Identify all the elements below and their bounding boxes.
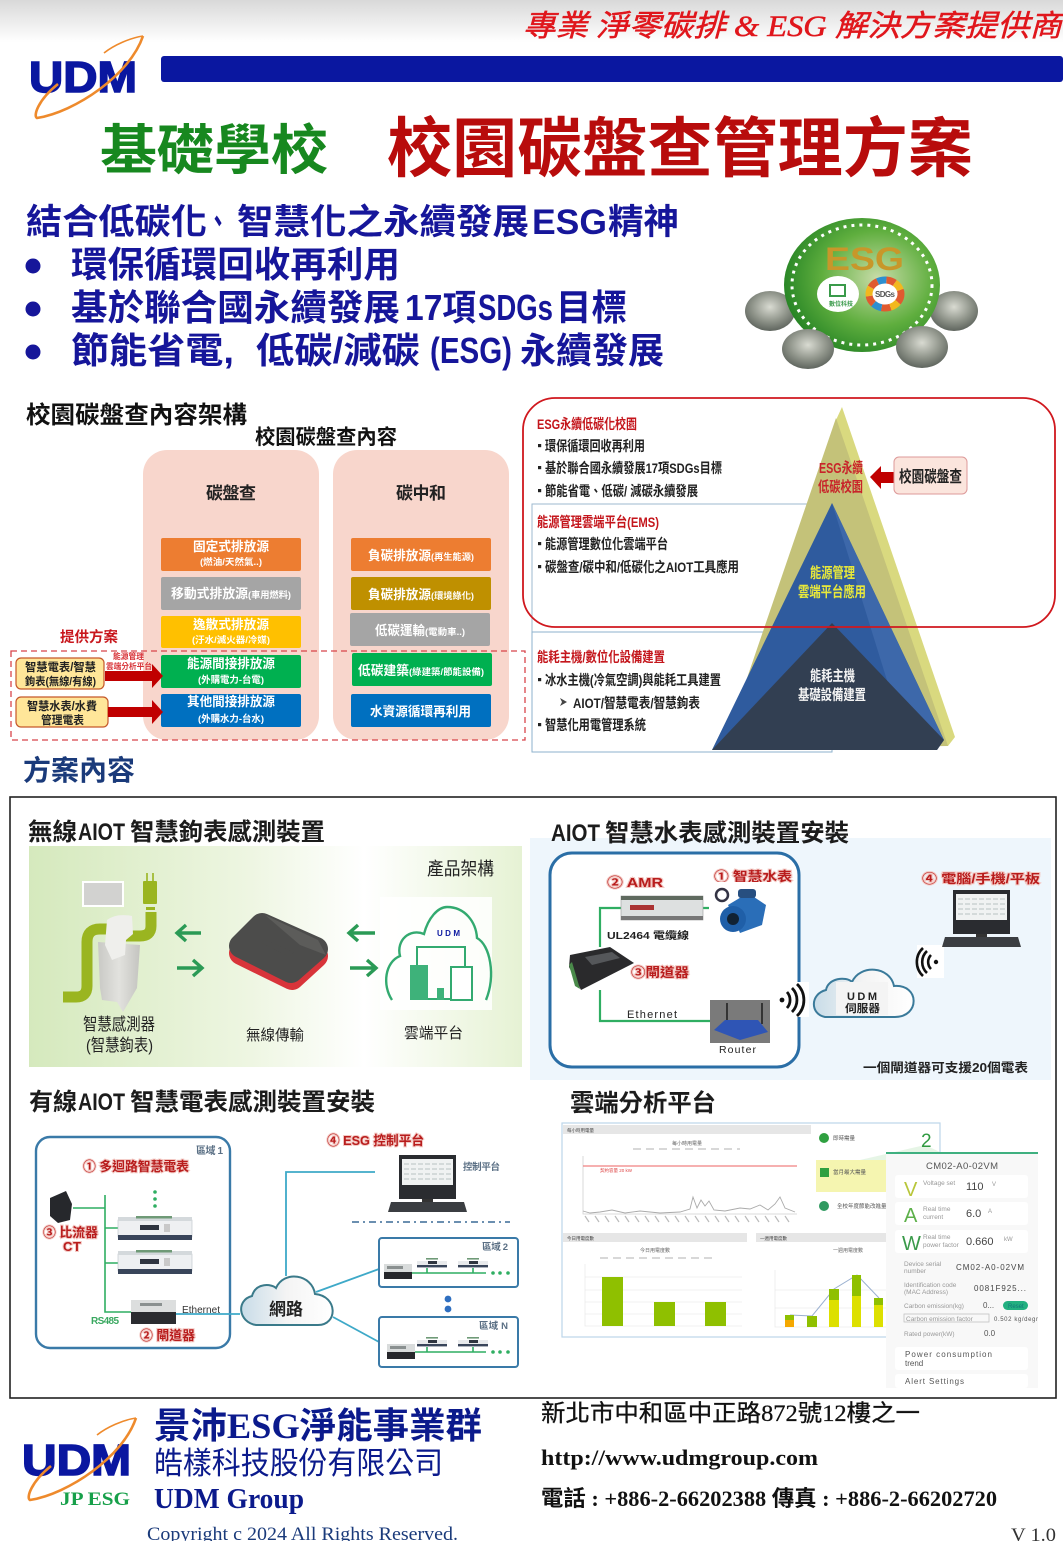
panel: smart water meter: UL2464 電纜線 [607,929,689,942]
demand cards: 全校年度節能改進量 [837,1202,887,1210]
footer logo: UDM [22,1436,131,1485]
intro text block: 永續發展 [520,330,664,371]
heading: wireless AIOT: 智慧鉤表感測裝置 [130,818,325,846]
zone 2: 區域 2 [482,1241,508,1253]
footer company: 景沛ESG淨能事業群 [154,1406,482,1446]
callout: offered solutions: 能源管理 [113,651,144,661]
chart: hourly demand: 每小時用電量 [672,1140,702,1147]
footer logo [22,1418,136,1510]
header band [0,0,1063,82]
pyramid shape [712,407,955,750]
intro text block: 環保循環回收再利用 [71,244,400,285]
icon: cloud platform: UDM [437,929,460,938]
callout: offered solutions: 智慧電表/智慧 [25,660,96,674]
panel: carbon inventory: 逸散式排放源 [193,617,269,632]
main frame [10,797,1056,1398]
callout: offered solutions: 提供方案 [60,628,118,646]
text: equipment: AIOT/智慧電表/智慧鉤表 [573,695,700,711]
footer contact [541,1400,997,1511]
icon: UDM server cloud: UDM [847,991,877,1003]
intro text block: 精神 [608,203,679,242]
chart: hourly demand [563,1125,811,1222]
panel: mobile device detail: current [923,1214,943,1221]
intro text block: 低碳/減碳 [256,330,420,371]
panel: mobile device detail: Device serial [904,1261,942,1268]
intro text block [26,203,679,371]
panel: smart water meter: ③閘道器 [631,965,689,980]
pyramid shape: 能源管理 [810,564,855,582]
callout: campus inventory: 校園碳盤查 [899,467,962,486]
chart: weekly usage bars [756,1233,887,1327]
panel: mobile device detail: CM02-A0-02VM [926,1161,998,1172]
icon: gateway [566,947,636,990]
text: ESG campus: 基於聯合國永續發展17項SDGs目標 [545,460,722,476]
panel: carbon inventory: (燃油/天然氣..) [200,556,262,567]
text: EMS: 碳盤查/碳中和/低碳化之AIOT工具應用 [545,559,739,575]
panel: smart water meter: ① 智慧水表 [714,869,792,884]
panel: wireless AIOT: 智慧感測器 [83,1014,155,1034]
panel: smart water meter: ④ 電腦/手機/平板 [922,871,1041,886]
panel: carbon neutrality: 碳中和 [396,484,446,503]
panel: mobile device detail: Reset [1008,1304,1024,1310]
arrows [177,925,376,976]
footer contact: 新北市中和區中正路872號12樓之一 [541,1400,920,1427]
icon: ESG badge [745,218,978,369]
panel: mobile device detail: 0.0 [984,1329,996,1338]
panel: mobile device detail: 0... [983,1301,994,1310]
panel: wired AIOT: CT [63,1239,81,1254]
panel: smart water meter: Ethernet [627,1009,677,1021]
heading: water meter: 智慧水表感測裝置安裝 [605,819,849,847]
panel: wired AIOT: Ethernet [182,1305,220,1316]
heading: water meter: AIOT [551,820,600,847]
panel: carbon neutrality: 負碳排放源 [368,548,431,563]
panel: carbon neutrality: (再生能源) [431,551,474,562]
panel: carbon inventory: 移動式排放源 [171,586,248,601]
panel: wireless AIOT: 雲端平台 [404,1025,463,1042]
intro text block: 節能省電, [71,330,234,371]
pyramid shape: 雲端平台應用 [798,583,866,601]
footer logo: JP ESG [60,1489,130,1510]
panel: wired AIOT: ② 閘道器 [140,1328,195,1343]
pyramid shape: 低碳校園 [818,478,863,496]
panel: carbon neutrality: 水資源循環再利用 [370,704,471,719]
callout: campus inventory [894,457,967,494]
panel: wireless AIOT: (智慧鉤表) [86,1036,153,1055]
title: 校園碳盤查管理方案 [387,112,973,185]
panel: carbon inventory: (外購水力-台水) [198,713,264,725]
icon: UDM server cloud [814,970,914,1017]
panel: mobile device detail: W [902,1233,921,1255]
panel: wireless AIOT: 產品架構 [427,859,494,879]
logo: UDM top [29,36,143,118]
icon: wired gateway [131,1300,176,1324]
panel: mobile device detail: Identification code [904,1282,957,1289]
footer company: UDM Group [154,1483,304,1515]
heading: wired AIOT: AIOT [78,1089,125,1116]
text: ESG campus: 環保循環回收再利用 [545,438,645,454]
icon: UDM server cloud: 伺服器 [845,1002,880,1015]
panel: mobile device detail: Voltage set [923,1180,955,1187]
panel: mobile device detail: 0.660 [966,1236,994,1248]
text: EMS [537,514,739,575]
chart: hourly demand: 每小時用電量 [567,1127,594,1134]
intro text block: 、 [207,203,229,242]
panel: carbon inventory: 固定式排放源 [193,539,269,554]
panel: wired AIOT: ③ 比流器 [43,1225,98,1240]
intro text block: SDGs [478,287,553,328]
panel: mobile device detail: V [992,1182,996,1188]
icon: network cloud: 網路 [269,1300,303,1319]
chart: hourly demand: 契約容量 20 kW [600,1167,633,1174]
demand cards: 2 [921,1131,932,1152]
panel: carbon neutrality: 低碳運輸 [375,623,425,638]
panel: mobile device detail: V [904,1179,918,1201]
panel: wired AIOT: ④ ESG 控制平台 [327,1133,424,1148]
panel: mobile device detail: 0081F925... [974,1284,1026,1293]
panel: mobile device detail: number [904,1268,927,1275]
footer company [154,1406,482,1515]
panel: carbon inventory: (汙水/滅火器/冷媒) [192,634,270,645]
heading: wired AIOT [29,1088,375,1116]
panel: mobile device detail: Rated power(kW) [904,1331,955,1338]
panel: smart water meter: 一個閘道器可支援20個電表 [863,1060,1029,1075]
pyramid shape: 能耗主機 [810,667,855,685]
intro text block: 結合低碳化 [26,203,207,242]
text: ESG campus: ESG永續低碳化校園 [537,416,637,432]
panel: mobile device detail [886,1152,1038,1388]
icon: computer [942,890,1021,947]
panel: carbon inventory: 其他間接排放源 [187,694,275,709]
icon: water meter [709,882,775,936]
text: ESG campus [537,416,722,499]
panel: mobile device detail: Real time [923,1234,951,1241]
intro text block: ESG [532,203,607,242]
heading: wireless AIOT: AIOT [78,819,125,846]
panel: wireless AIOT [28,818,522,1067]
panel: cloud analytics [562,1089,1038,1388]
callout: offered solutions: 鉤表(無線/有線) [25,674,96,688]
text: EMS: 能源管理數位化雲端平台 [545,536,668,552]
panel: mobile device detail: power factor [923,1242,960,1249]
callout: offered solutions [11,628,525,740]
demand cards: 當月最大需量 [833,1168,867,1176]
heading: content framework: 校園碳盤查內容架構 [26,402,247,429]
icon: smart sensor [63,873,157,1012]
slogan: 專業 淨零碳排 & ESG 解決方案提供商 [523,10,1063,43]
zone N: 區域 N [479,1320,508,1332]
panel: smart water meter: Router [719,1044,756,1056]
panel: mobile device detail: Carbon emission(kg) [904,1303,964,1310]
heading: solution content: 方案內容 [23,755,135,786]
intro text block: 基於聯合國永續發展 [71,287,400,328]
panel: mobile device detail: Power consumption [905,1350,992,1359]
icon: cloud platform [380,897,492,1010]
chart: daily usage bars [563,1233,747,1326]
pyramid shape: ESG永續 [819,459,863,477]
blue header bar [161,56,1063,82]
chart: weekly usage bars: 一週用電度數 [833,1247,863,1254]
logo: UDM top: UDM [29,53,137,102]
panel: carbon inventory: 能源間接排放源 [187,656,275,671]
icon: network cloud [241,1277,333,1325]
panel: mobile device detail: (MAC Address) [904,1289,948,1296]
title [100,112,973,185]
heading: wired AIOT: 智慧電表感測裝置安裝 [130,1088,375,1116]
panel: wireless AIOT: 無線傳輸 [246,1027,304,1044]
panel: mobile device detail: Real time [923,1206,951,1213]
icon: ESG badge: SDGs [875,290,896,299]
panel: carbon neutrality: (綠建築/節能設備) [409,666,484,677]
icon: wireless gateway [241,915,326,978]
footer company: 皓樣科技股份有限公司 [154,1446,443,1481]
pyramid shape: 基礎設備建置 [798,686,866,704]
icon: router [710,1000,770,1043]
panel: wired AIOT [29,1088,518,1367]
icon: wifi right [774,982,809,1017]
panel: smart water meter [530,819,1051,1080]
demand cards: 即時需量 [833,1134,856,1142]
panel: cloud analytics: 雲端分析平台 [570,1089,716,1117]
arrow: to pyramid top [870,466,894,489]
panel: pyramid [523,398,1055,752]
panel: mobile device detail: trend [905,1359,923,1368]
text: equipment [537,649,721,733]
text: EMS: 能源管理雲端平台(EMS) [537,514,659,530]
panel: mobile device detail: A [988,1209,992,1215]
intro text block: 目標 [556,287,627,328]
demand cards [816,1131,940,1211]
panel: mobile device detail: 0.502 kg/degr [994,1317,1038,1323]
heading: wired AIOT: 有線 [29,1089,77,1116]
panel: smart water meter: ② AMR [607,875,664,890]
panel: carbon neutrality [333,450,509,740]
icon: ESG badge: 數位科技 [829,300,853,308]
panel: carbon inventory [143,450,319,740]
text: ESG campus: 節能省電、低碳/ 減碳永續發展 [545,483,698,499]
panel: mobile device detail: A [904,1205,918,1227]
panel: wired AIOT: 控制平台 [463,1161,500,1173]
panel: carbon neutrality: 低碳建築 [358,663,409,678]
zone N [379,1317,518,1367]
panel: mobile device detail: CM02-A0-02VM [956,1263,1024,1272]
panel: mobile device detail: Carbon emission factor [906,1316,974,1323]
panel: mobile device detail: 6.0 [966,1208,981,1220]
panel: carbon neutrality: (環境綠化) [431,590,474,601]
heading: wireless AIOT [28,818,325,846]
panel: carbon inventory: 碳盤查 [206,484,256,503]
text: equipment: 能耗主機/數位化設備建置 [537,649,665,665]
footer contact: 電話 : +886-2-66202388 傳真 : +886-2-66202720 [541,1486,997,1511]
zone 2 [379,1238,518,1287]
icon: AMR [621,896,703,920]
chart: daily usage bars: 今日用電度數 [640,1247,670,1254]
chart: weekly usage bars: 一週用電度數 [760,1235,787,1242]
footer contact: http://www.udmgroup.com [541,1445,818,1470]
icon: current transformer [50,1191,72,1223]
panel: wired AIOT: 區域 1 [196,1144,223,1157]
panel: carbon inventory: (外購電力-台電) [198,674,264,686]
panel: carbon inventory: (車用燃料) [248,589,291,600]
intro text block: 17項 [405,287,476,328]
heading: wireless AIOT: 無線 [28,818,77,846]
panel: wired AIOT: ① 多迴路智慧電表 [83,1159,189,1174]
callout: offered solutions: 智慧水表/水費 [27,699,97,713]
intro text block: 智慧化之永續發展 [237,203,529,242]
panel: mobile device detail: Alert Settings [905,1377,964,1386]
panel: carbon neutrality: 負碳排放源 [368,587,431,602]
icon: control computer [388,1155,467,1212]
panel: mobile device detail: 110 [966,1181,984,1193]
callout: offered solutions: 管理電表 [41,713,84,727]
icon: ESG badge: ESG [825,241,904,277]
title: 基礎學校 [100,121,328,181]
icon: wifi left [917,945,944,978]
chart: daily usage bars: 今日用電度數 [567,1235,594,1242]
heading: content: 校園碳盤查內容 [255,425,397,449]
callout: offered solutions: 雲端分析平台 [106,661,152,671]
panel: carbon neutrality: (電動車..) [425,626,465,637]
panel: mobile device detail: kW [1004,1237,1013,1243]
text: equipment: 智慧化用電管理系統 [545,717,646,733]
intro text block: (ESG) [430,330,512,371]
panel: wired AIOT: RS485 [91,1316,119,1327]
text: equipment: 冰水主機(冷氣空調)與能耗工具建置 [545,672,721,688]
